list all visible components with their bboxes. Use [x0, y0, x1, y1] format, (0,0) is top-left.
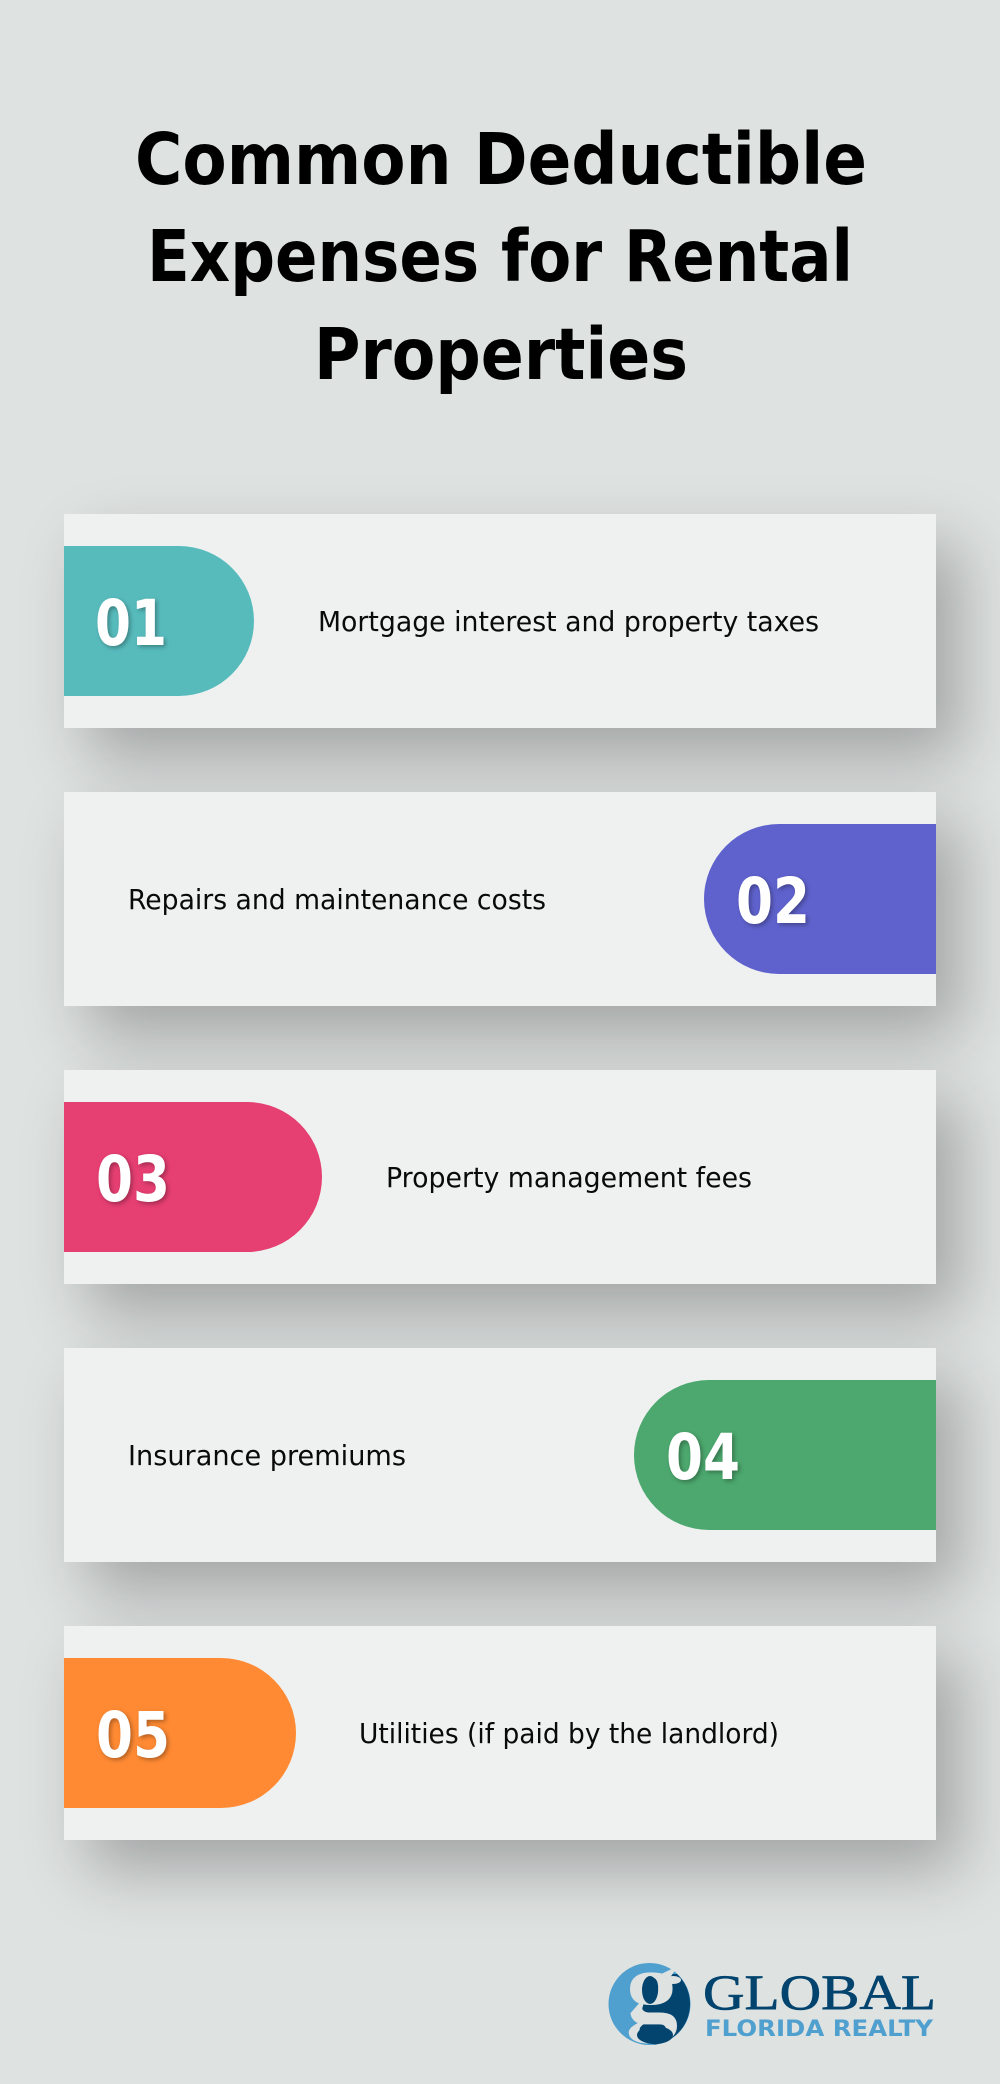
number badge 03: [64, 1102, 322, 1252]
wordmark: FLORIDA REALTY: FLORIDA REALTY: [705, 2017, 934, 2042]
wordmark: GLOBAL: GLOBAL: [703, 1964, 936, 2020]
panel: item 05: [64, 1626, 936, 1840]
panel: item 03: [64, 1070, 936, 1284]
title: Expenses for Rental: [147, 215, 853, 298]
text: property management: Property management fees: [386, 1161, 752, 1194]
title: Common Deductible: [135, 118, 867, 201]
text: insurance: Insurance premiums: [128, 1439, 406, 1472]
number badge 02: [704, 824, 936, 974]
number badge 01: [64, 546, 254, 696]
number badge 02: 02: [736, 865, 810, 938]
icon: g monogram: g: [626, 1930, 678, 2044]
panel: item 01: [64, 514, 936, 728]
text: mortgage interest: Mortgage interest and property taxes: [318, 605, 819, 638]
title: Properties: [314, 313, 688, 396]
number badge 03: 03: [96, 1143, 170, 1216]
icon: g monogram: [608, 1930, 690, 2045]
text: repairs: Repairs and maintenance costs: [128, 883, 546, 916]
number badge 01: 01: [95, 587, 167, 660]
number badge 04: 04: [666, 1421, 740, 1494]
number badge 04: [634, 1380, 936, 1530]
number badge 05: 05: [96, 1699, 170, 1772]
number badge 05: [64, 1658, 296, 1808]
title: [135, 118, 867, 396]
panel: item 02: [64, 792, 936, 1006]
panel: item 04: [64, 1348, 936, 1562]
text: utilities: Utilities (if paid by the landlord): [359, 1717, 779, 1750]
